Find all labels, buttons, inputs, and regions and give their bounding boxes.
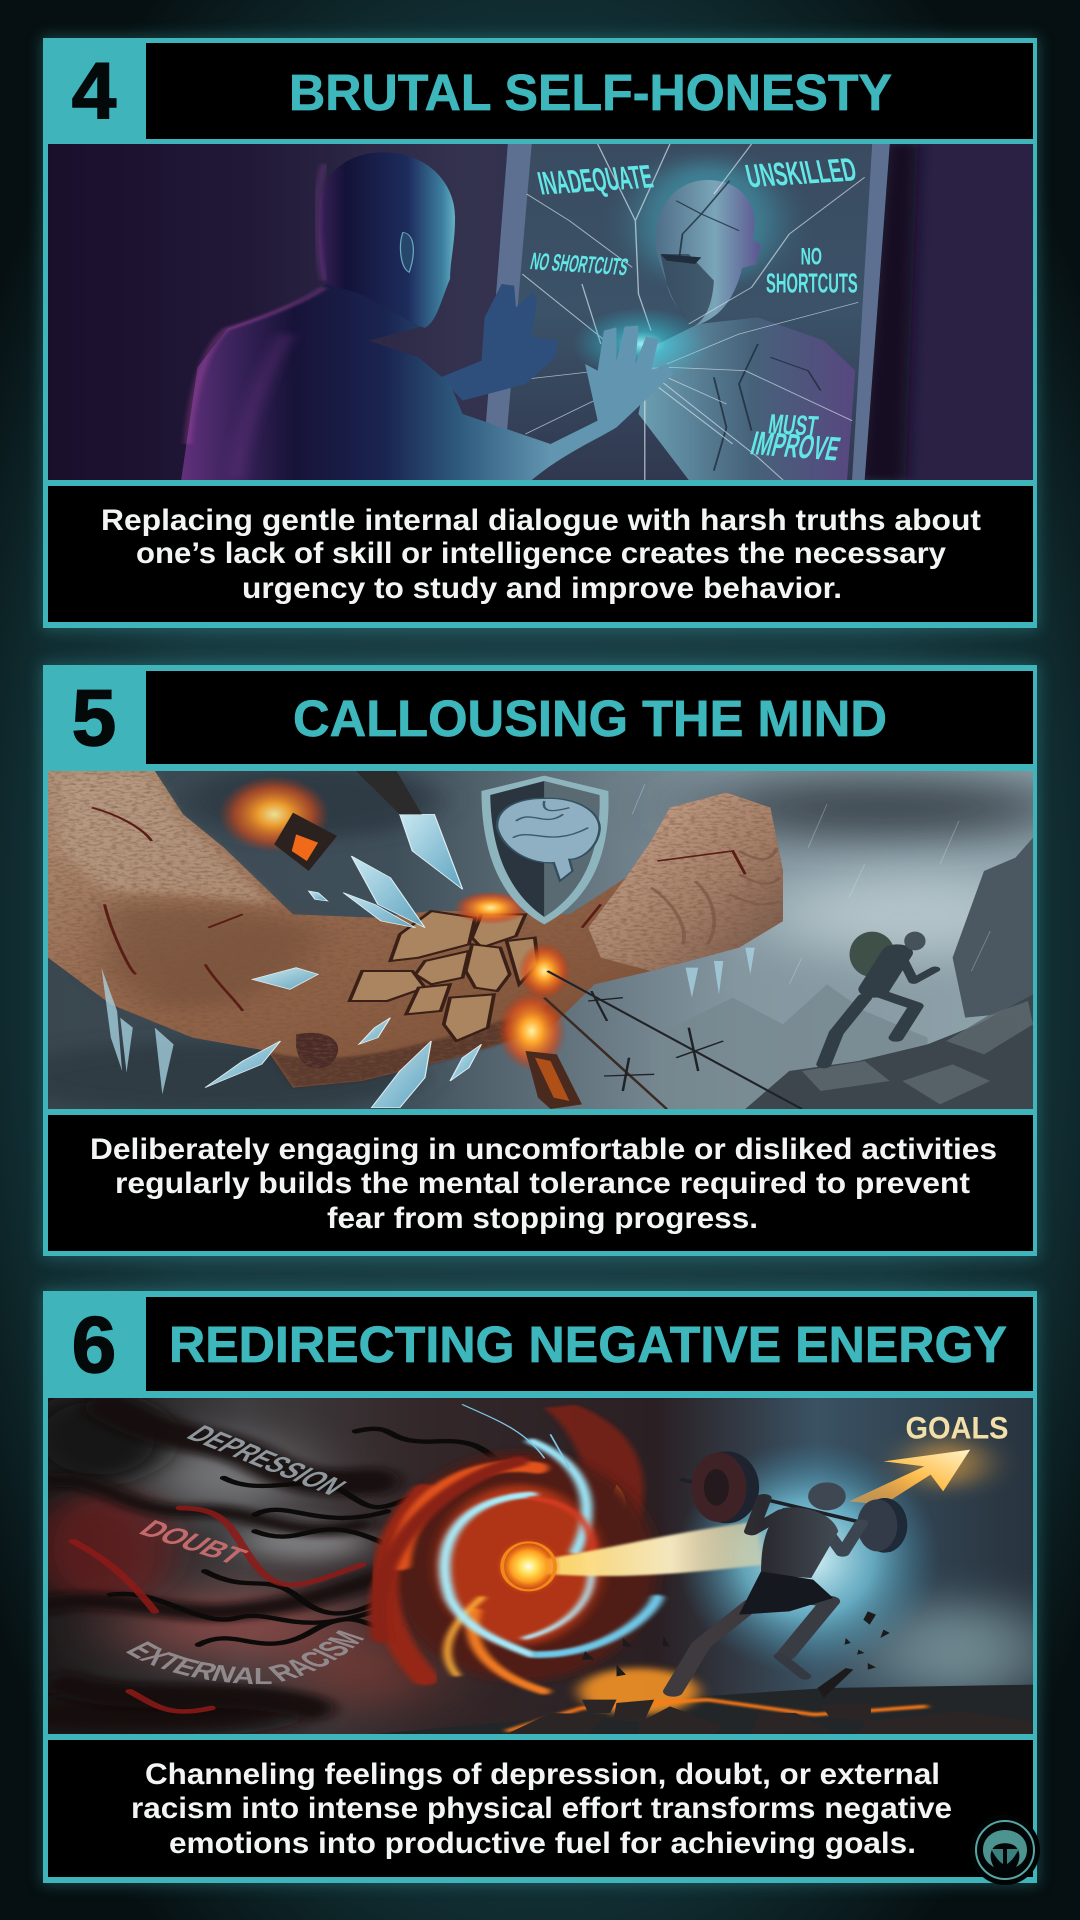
fire along wrist [518,943,571,999]
number badge 6: 6 [72,1300,116,1389]
heading: redirecting negative energy [146,1297,1033,1391]
mirror frame [481,144,890,480]
reflection figure [638,180,855,480]
red flames behind vortex [544,1405,644,1543]
far hand in mirror [441,284,558,401]
description text: racism into intense physical effort transforms negative [131,1792,952,1825]
shield with brain icon [481,776,609,924]
cracked callus plates [350,911,538,1041]
flying debris [582,1611,890,1698]
heading: brutal self-honesty [146,43,1033,139]
icicles [101,948,755,1094]
arrow to goals [849,1440,984,1505]
description text: one’s lack of skill or intelligence creates the necessary [136,537,946,570]
mirror words: NO SHORTCUTS [528,247,631,281]
heading: brutal self-honesty: BRUTAL SELF-HONESTY [289,64,892,121]
emotion words: DEPRESSION [179,1421,354,1500]
description text: regularly builds the mental tolerance required to prevent [115,1167,970,1200]
cracks in mirror [513,144,865,480]
heading: redirecting negative energy: REDIRECTING NEGATIVE ENERGY [169,1316,1007,1373]
description text: Deliberately engaging in uncomfortable or disliked activities [90,1133,997,1166]
burning rock below arm [525,1051,582,1109]
rocky slope [745,994,1033,1109]
ice shards [205,814,481,1108]
description text: fear from stopping progress. [327,1202,758,1235]
description text [48,486,1033,622]
hiker [824,932,935,1064]
ground with lava [375,1668,1033,1734]
man seen from behind [181,152,673,480]
description text [48,1740,1033,1877]
panel: brutal self-honesty [43,38,1037,628]
description text: Replacing gentle internal dialogue with harsh truths about [101,504,981,537]
heading: callousing the mind: CALLOUSING THE MIND [293,690,887,747]
rain [632,784,990,984]
mirror words: NO [801,243,822,270]
barbed wire [544,971,802,1109]
emotion words [126,1421,364,1684]
mirror words [528,151,860,468]
number badge 5: 5 [72,673,116,762]
calloused arm [48,771,783,1088]
description text: Channeling feelings of depression, doubt, or external [145,1758,940,1791]
number badge 4: 4 [72,46,117,135]
cyan aura [676,1441,940,1675]
dark emotion smoke [48,1408,532,1711]
energy beam [532,1521,764,1576]
vortex [378,1405,657,1691]
illustration: vortex of negative emotions fuelling a runner [48,1398,1033,1734]
description text: emotions into productive fuel for achieving goals. [169,1827,916,1860]
flaming rock [219,776,337,871]
emotion words: EXTERNAL RACISM [126,1630,364,1684]
logo badge [975,1820,1040,1885]
heading: callousing the mind [146,671,1033,764]
runner with barbell [673,1451,907,1691]
distant mountains [651,984,927,1109]
panel: redirecting negative energy [43,1291,1037,1883]
panel: callousing the mind [43,665,1037,1256]
description text [48,1115,1033,1251]
illustration: man facing cracked mirror [48,144,1033,480]
mirror words: MUST [766,408,820,442]
skin texture [48,771,783,1088]
emotion words: DOUBT [132,1516,254,1569]
description text: urgency to study and improve behavior. [242,572,842,605]
illustration: calloused arm in storm [48,771,1033,1109]
